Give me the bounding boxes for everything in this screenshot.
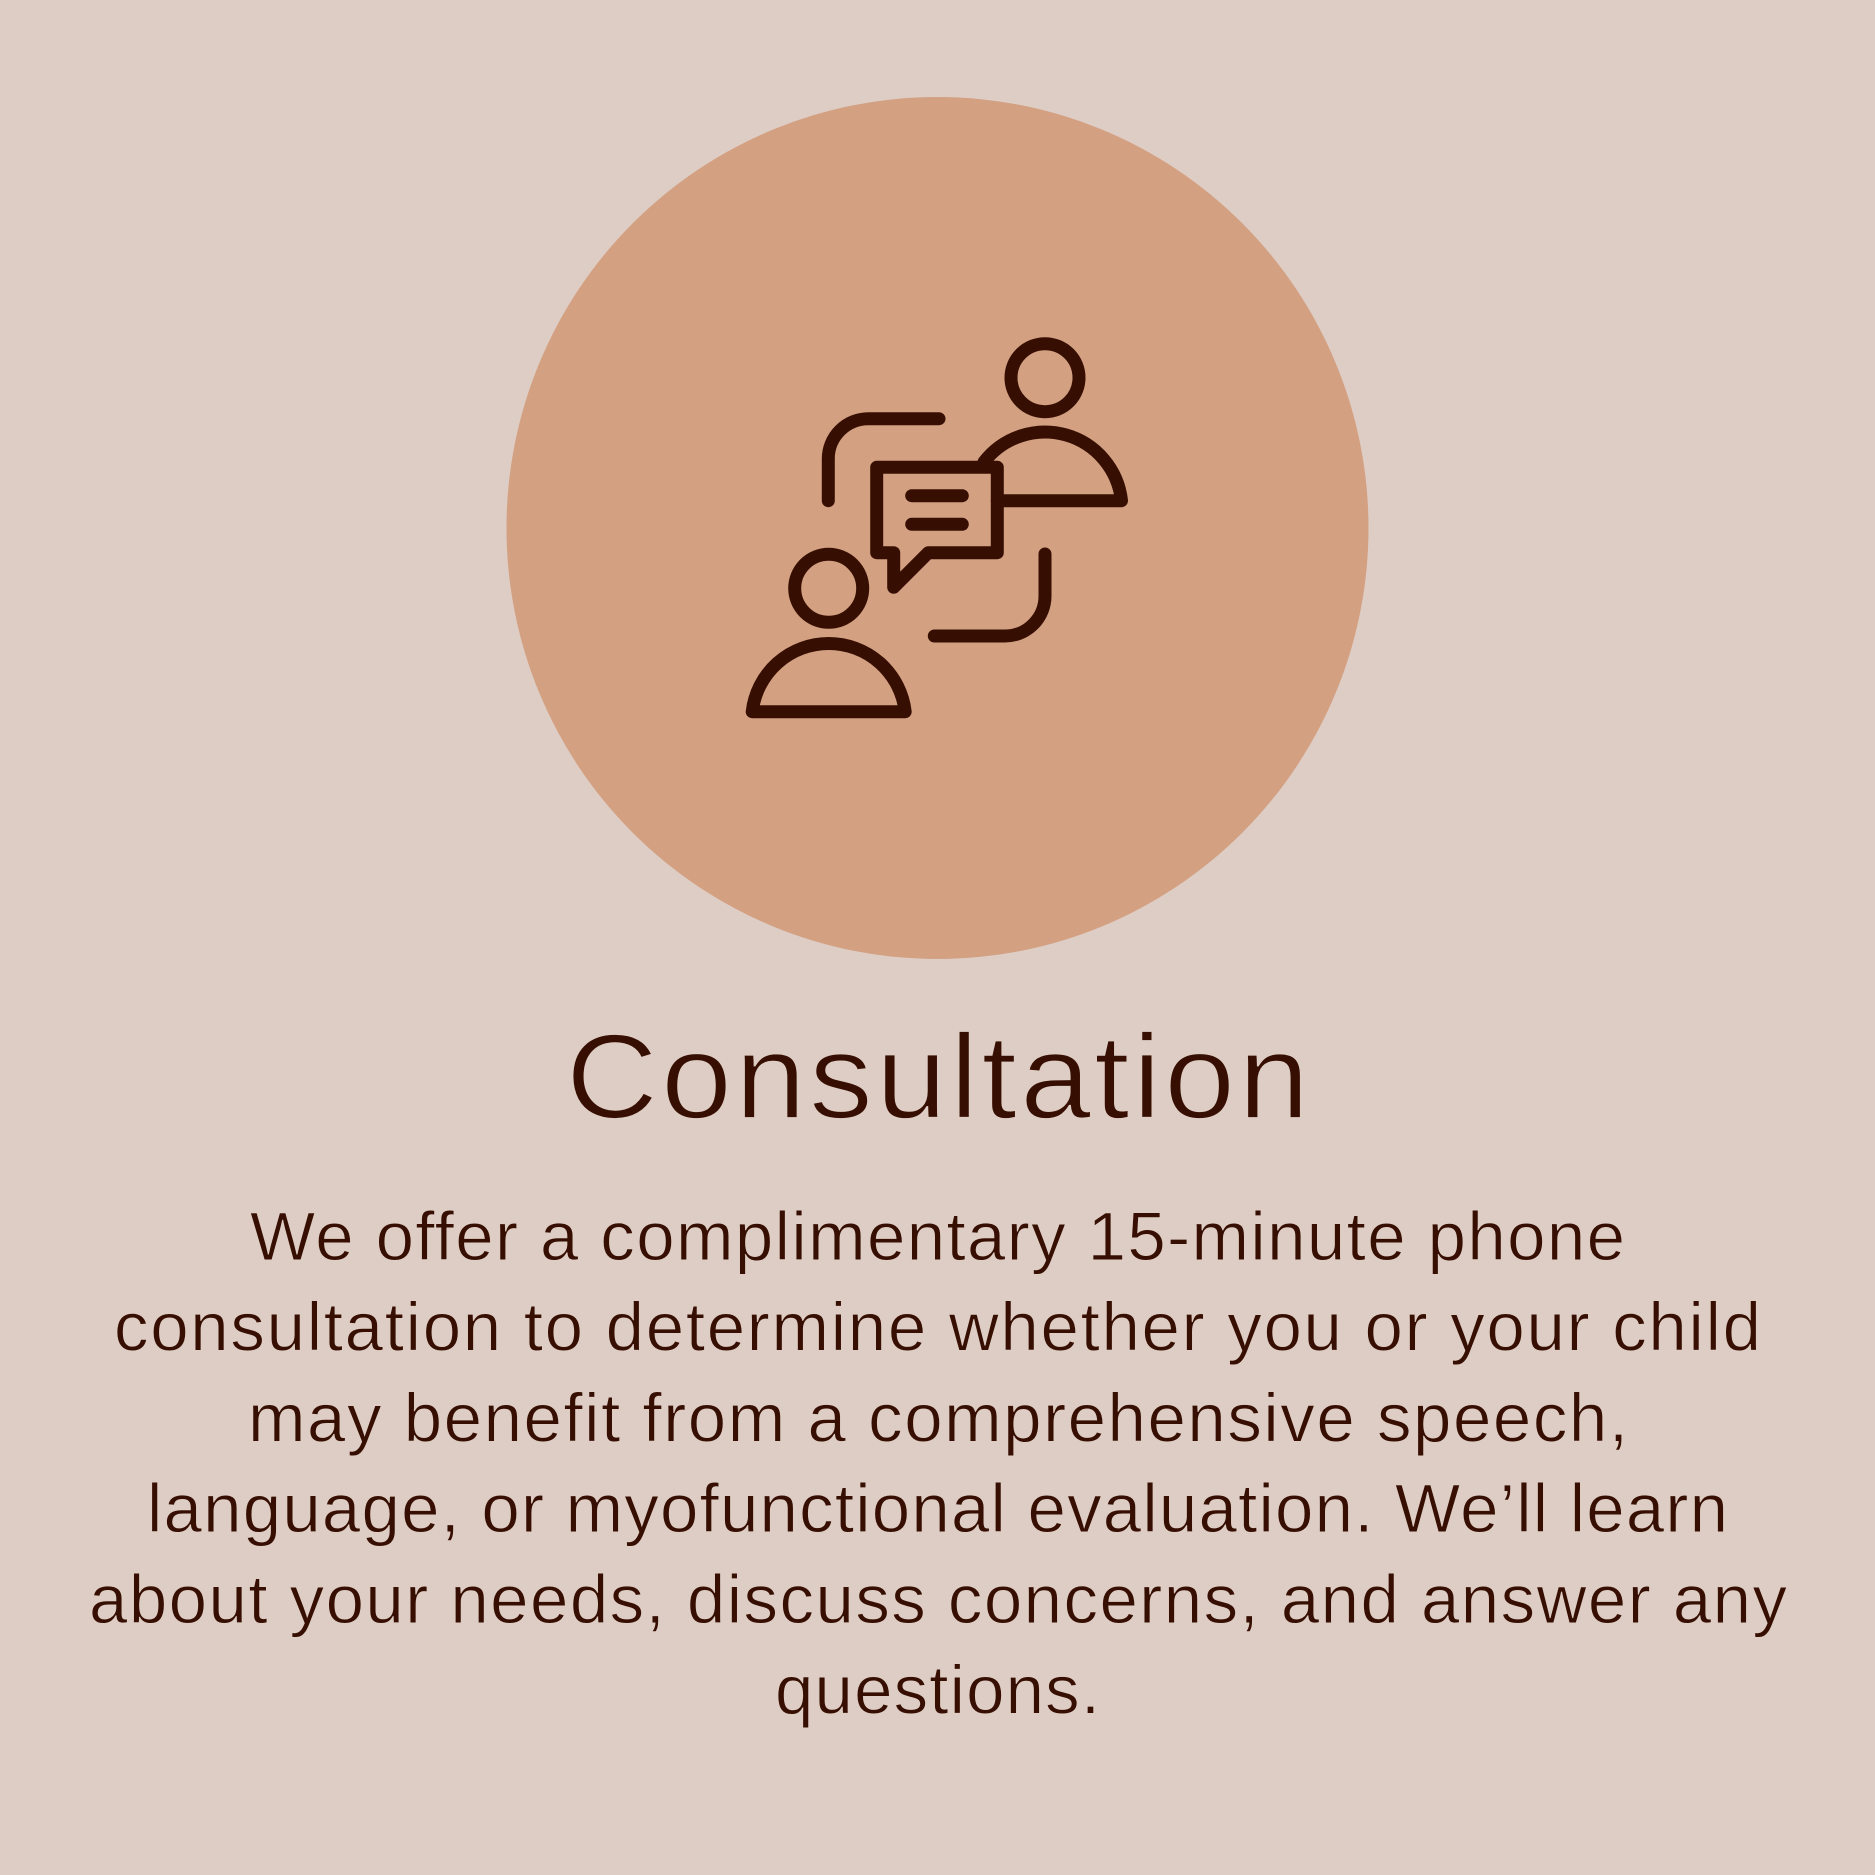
icon: speech bubble [877, 467, 997, 587]
icon: lower right bracket [934, 554, 1045, 636]
icon: upper person [984, 344, 1122, 501]
body text: We offer a complimentary 15-minute phone [250, 1198, 1625, 1275]
icon: lower person [752, 554, 905, 712]
body text [89, 1198, 1788, 1728]
body text: questions. [775, 1652, 1100, 1728]
body text: language, or myofunctional evaluation. We’ll learn [147, 1470, 1728, 1547]
body text: consultation to determine whether you or your child [114, 1289, 1761, 1366]
icon: upper left bracket [828, 419, 939, 501]
body text: about your needs, discuss concerns, and answer any [89, 1561, 1788, 1638]
title: Consultation [566, 1010, 1309, 1144]
body text: may benefit from a comprehensive speech, [248, 1379, 1628, 1456]
icon: two people consulting with speech bubble [752, 344, 1122, 712]
icon circle background [506, 97, 1368, 959]
